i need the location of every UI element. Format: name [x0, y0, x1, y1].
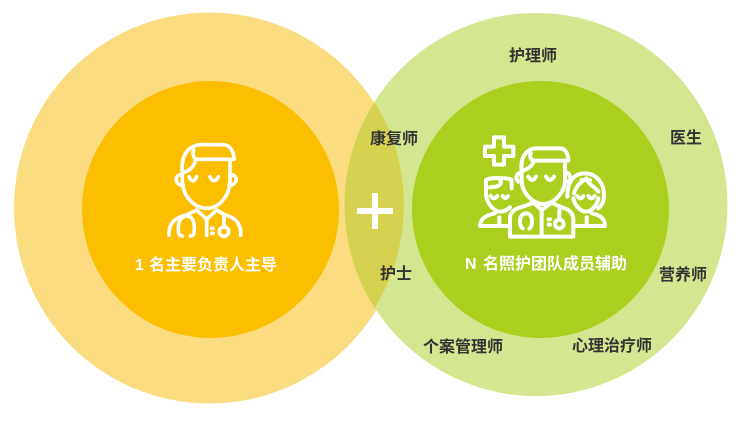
icon: right nurse — [567, 173, 605, 226]
left circle caption: 名主要负责人主导 — [149, 255, 277, 274]
plus sign — [357, 193, 393, 229]
icon: medical cross — [485, 137, 513, 165]
icon: doctor — [169, 145, 241, 236]
icon: centre doctor — [510, 148, 573, 237]
label: case manager: 个案管理师 — [423, 337, 503, 356]
right circle caption: N — [465, 256, 477, 273]
left circle caption: 1 — [135, 257, 144, 274]
right inner circle — [412, 81, 669, 338]
label: nurse: 护士 — [380, 265, 412, 283]
label: rehabilitation therapist: 康复师 — [370, 129, 418, 148]
label: psychotherapist: 心理治疗师 — [572, 336, 652, 355]
right outer circle — [344, 13, 728, 396]
left outer circle — [14, 12, 405, 404]
label: dietitian: 营养师 — [659, 265, 707, 284]
right circle caption: 名照护团队成员辅助 — [483, 254, 627, 273]
icon: care team — [480, 137, 605, 237]
label: nurse practitioner: 护理师 — [509, 47, 557, 65]
overlap lens — [345, 102, 404, 308]
label: doctor: 医生 — [670, 129, 702, 147]
left inner circle — [82, 81, 339, 338]
icon: left nurse — [480, 178, 512, 226]
